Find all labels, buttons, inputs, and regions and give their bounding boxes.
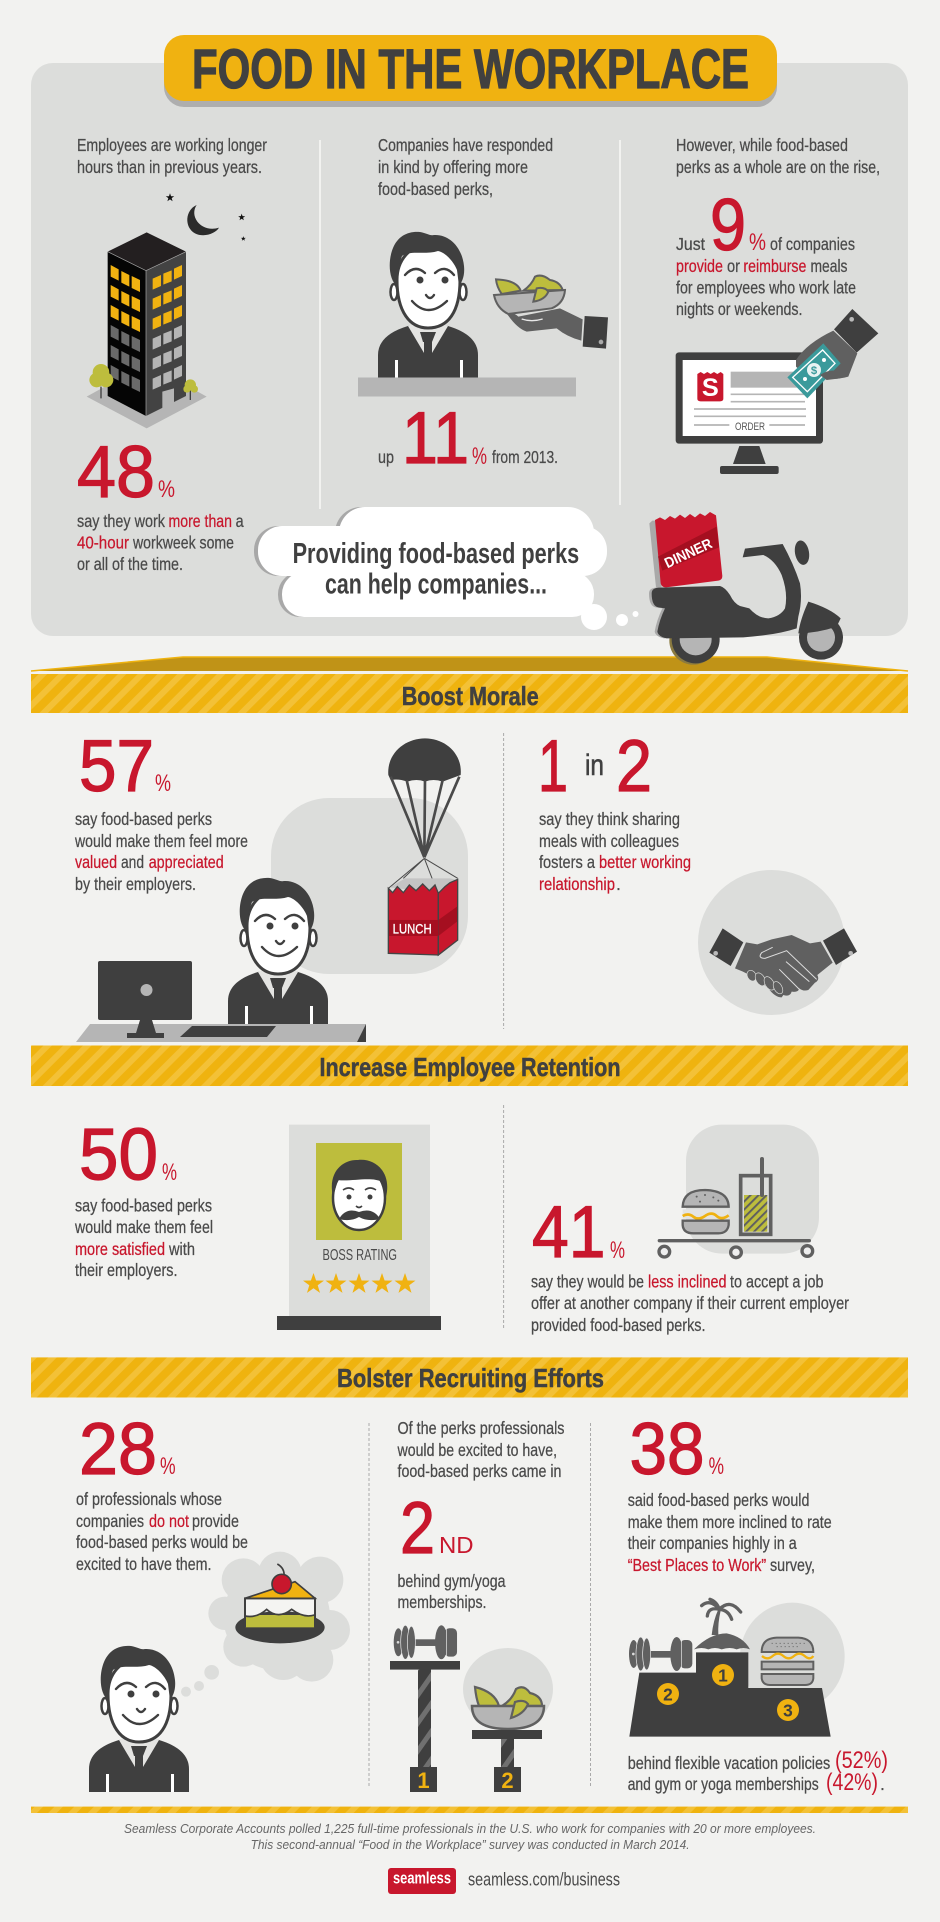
column 3 text with 9 percent stat bbox=[676, 135, 880, 319]
column 3 text with 9 percent stat: 9 bbox=[710, 185, 746, 266]
stat: 28 percent: do not bbox=[149, 1511, 189, 1531]
stat: 1 in 2: meals with colleagues bbox=[539, 831, 679, 851]
stat: 57 percent: % bbox=[155, 770, 171, 797]
panel: intro bbox=[31, 35, 908, 665]
section banner: Bolster Recruiting Efforts bbox=[31, 1357, 908, 1398]
icon: second place pedestal with salad: 2 bbox=[501, 1768, 514, 1793]
stat: 57 percent: would make them feel more bbox=[74, 831, 248, 851]
stat: 57 percent bbox=[74, 726, 248, 894]
stat: 48 percent: or all of the time. bbox=[77, 554, 183, 574]
stat: 57 percent: and bbox=[121, 852, 144, 872]
footnote: Seamless Corporate Accounts polled 1,225 full-time professionals in the U.S. who work for companies with 20 or more employees. bbox=[124, 1821, 816, 1836]
icon: lunch bag parachute bbox=[388, 738, 461, 955]
column 2 text: Companies have responded bbox=[378, 135, 553, 155]
stat: 57 percent: say food-based perks bbox=[75, 809, 212, 829]
icon: monitor with order and hand holding cash: ORDER bbox=[735, 421, 765, 433]
text: ranked second: ND bbox=[439, 1532, 474, 1558]
stat: 48 percent: 48 bbox=[77, 432, 155, 513]
stat: 41 percent: to accept a job bbox=[730, 1272, 824, 1292]
title banner bbox=[164, 35, 777, 107]
column 3 text with 9 percent stat: meals bbox=[810, 256, 848, 276]
five star rating bbox=[303, 1273, 416, 1293]
icon: night office building bbox=[87, 193, 246, 428]
section banner: Boost Morale bbox=[31, 674, 908, 713]
stat: 1 in 2 bbox=[538, 726, 691, 894]
shelf under intro panel bbox=[31, 657, 908, 671]
stat: up 11 percent: % bbox=[472, 443, 487, 470]
stat: 41 percent: provided food-based perks. bbox=[531, 1315, 706, 1335]
stat: 1 in 2: 2 bbox=[616, 726, 652, 807]
footer stripe bbox=[31, 1807, 908, 1813]
stat: 1 in 2: fosters a bbox=[539, 852, 595, 872]
stat: 28 percent: food-based perks would be bbox=[76, 1532, 248, 1552]
stat: 48 percent: more than bbox=[168, 511, 232, 531]
stat: 50 percent bbox=[74, 1114, 213, 1280]
section banner: Increase Employee Retention: Increase Employee Retention bbox=[320, 1052, 620, 1082]
stat: up 11 percent bbox=[378, 398, 558, 479]
icon: lunch bag parachute: LUNCH bbox=[393, 920, 432, 936]
dividers bbox=[369, 1423, 590, 1787]
stat: 28 percent: 28 bbox=[79, 1409, 157, 1490]
icon: thought cloud with cake bbox=[181, 1552, 350, 1697]
stat: up 11 percent: up bbox=[378, 447, 394, 467]
stat: up 11 percent: 11 bbox=[402, 398, 469, 479]
text: ranked second: 2 bbox=[400, 1488, 435, 1569]
icon: monitor with order and hand holding cash bbox=[676, 309, 878, 474]
section banner: Boost Morale: Boost Morale bbox=[402, 681, 539, 711]
stat: 1 in 2: relationship bbox=[539, 874, 615, 894]
section banner: Increase Employee Retention bbox=[31, 1046, 908, 1086]
stat: 1 in 2: 1 bbox=[538, 726, 568, 807]
column 1 text: Employees are working longer bbox=[77, 135, 267, 155]
column 2 text: in kind by offering more bbox=[378, 157, 528, 177]
background blob behind lunch bbox=[271, 798, 468, 974]
stat: 41 percent: 41 bbox=[532, 1192, 606, 1273]
boss rating card bbox=[277, 1125, 441, 1330]
stat: 28 percent bbox=[76, 1409, 248, 1574]
column 3 text with 9 percent stat: However, while food-based bbox=[676, 135, 848, 155]
column 3 text with 9 percent stat: of companies bbox=[770, 234, 855, 254]
divider bbox=[503, 1105, 505, 1328]
stat: up 11 percent: from 2013. bbox=[492, 447, 558, 467]
stat: 28 percent: companies bbox=[76, 1511, 144, 1531]
icon: delivery scooter with dinner bag: DINNER bbox=[662, 536, 715, 572]
text: ranked second: Of the perks professionals bbox=[398, 1418, 565, 1438]
boss rating card: BOSS RATING bbox=[322, 1247, 397, 1264]
icon: boss face bbox=[332, 1160, 387, 1230]
footnote: This second-annual “Food in the Workplace” survey was conducted in March 2014. bbox=[251, 1837, 690, 1852]
column 3 text with 9 percent stat: provide bbox=[676, 256, 723, 276]
stat: 50 percent: more satisfied bbox=[75, 1239, 165, 1259]
text: behind flexible vacation and gym: and gym or yoga memberships bbox=[628, 1774, 819, 1794]
stat: 41 percent: offer at another company if their current employer bbox=[531, 1293, 849, 1313]
stat: 38 percent: % bbox=[709, 1453, 724, 1480]
seamless logo and url: seamless.com/business bbox=[468, 1870, 620, 1890]
text: ranked second bbox=[397, 1418, 565, 1612]
thought cloud callout: Providing food-based perks bbox=[293, 538, 579, 570]
icon: second place pedestal with salad bbox=[463, 1648, 553, 1793]
seamless logo and url: seamless bbox=[393, 1868, 451, 1888]
stat: 50 percent: with bbox=[168, 1239, 195, 1259]
stat: 41 percent: say they would be bbox=[531, 1272, 644, 1292]
stat: 50 percent: would make them feel bbox=[74, 1217, 213, 1237]
icon: winners podium: 3 bbox=[783, 1700, 793, 1720]
stat: 38 percent: their companies highly in a bbox=[628, 1533, 797, 1553]
icon: winners podium: 1 bbox=[718, 1665, 728, 1685]
column 3 text with 9 percent stat: for employees who work late bbox=[676, 278, 856, 298]
thought cloud callout bbox=[254, 507, 638, 630]
icon: delivery scooter with dinner bag bbox=[649, 512, 843, 665]
column 3 text with 9 percent stat: perks as a whole are on the rise, bbox=[676, 157, 880, 177]
stat: 50 percent: % bbox=[162, 1159, 177, 1186]
stat: 38 percent: survey, bbox=[770, 1555, 815, 1575]
column 2 text bbox=[378, 135, 553, 199]
thought cloud callout: can help companies... bbox=[325, 568, 547, 600]
column 3 text with 9 percent stat: reimburse bbox=[743, 256, 806, 276]
stat: 38 percent bbox=[628, 1409, 832, 1575]
stat: 48 percent: say they work bbox=[77, 511, 165, 531]
divider bbox=[503, 733, 505, 1029]
column 1 text bbox=[77, 135, 267, 177]
column 3 text with 9 percent stat: % bbox=[749, 229, 766, 256]
icon: first place pedestal with dumbbell: 1 bbox=[417, 1768, 430, 1793]
text: behind flexible vacation and gym: behind flexible vacation policies bbox=[628, 1753, 831, 1773]
text: behind flexible vacation and gym: . bbox=[880, 1774, 885, 1794]
stat: 57 percent: appreciated bbox=[149, 852, 224, 872]
stat: 50 percent: say food-based perks bbox=[75, 1196, 212, 1216]
title banner: FOOD IN THE WORKPLACE bbox=[192, 37, 749, 100]
icon: winners podium: 2 bbox=[663, 1684, 673, 1704]
stat: 1 in 2: in bbox=[585, 749, 604, 782]
stat: 48 percent: workweek some bbox=[132, 532, 234, 552]
stat: 1 in 2: say they think sharing bbox=[539, 809, 680, 829]
stat: 41 percent: less inclined bbox=[648, 1272, 726, 1292]
column 1 text: hours than in previous years. bbox=[77, 157, 262, 177]
stat: 38 percent: make them more inclined to rate bbox=[628, 1512, 832, 1532]
stat: 41 percent bbox=[531, 1192, 849, 1335]
icon: employee at counter bbox=[378, 232, 478, 378]
stat: 57 percent: by their employers. bbox=[75, 874, 196, 894]
stat: 28 percent: excited to have them. bbox=[76, 1554, 212, 1574]
stat: 50 percent: their employers. bbox=[75, 1260, 178, 1280]
stat: 48 percent: % bbox=[158, 476, 175, 503]
stat: 57 percent: 57 bbox=[79, 726, 154, 807]
icon: handshake bbox=[698, 870, 857, 1015]
stat: 28 percent: of professionals whose bbox=[76, 1489, 222, 1509]
stat: 38 percent: 38 bbox=[630, 1409, 704, 1490]
text: behind flexible vacation and gym: (42%) bbox=[826, 1769, 878, 1796]
stat: 48 percent: a bbox=[236, 511, 244, 531]
icon: burger and drink on cart bbox=[659, 1125, 819, 1258]
section banner: Bolster Recruiting Efforts: Bolster Recruiting Efforts bbox=[337, 1363, 604, 1393]
text: ranked second: would be excited to have, bbox=[397, 1440, 557, 1460]
stat: 48 percent bbox=[77, 432, 244, 574]
stat: 28 percent: % bbox=[160, 1453, 176, 1480]
stat: 48 percent: 40-hour bbox=[77, 532, 129, 552]
column 3 text with 9 percent stat: or bbox=[727, 256, 740, 276]
stat: 38 percent: said food-based perks would bbox=[628, 1490, 809, 1510]
icon: worker at desk bbox=[76, 878, 366, 1042]
text: ranked second: food-based perks came in bbox=[398, 1461, 562, 1481]
icon: monitor with order and hand holding cash: $ bbox=[811, 365, 818, 377]
stat: 50 percent: 50 bbox=[79, 1114, 158, 1196]
icon: first place pedestal with dumbbell bbox=[390, 1625, 460, 1793]
stat: 57 percent: valued bbox=[75, 852, 117, 872]
icon: winners podium bbox=[629, 1599, 845, 1737]
column 2 text: food-based perks, bbox=[378, 179, 493, 199]
column 3 text with 9 percent stat: nights or weekends. bbox=[676, 299, 802, 319]
stat: 41 percent: % bbox=[610, 1237, 625, 1264]
stat: 28 percent: provide bbox=[192, 1511, 239, 1531]
text: behind flexible vacation and gym: (52%) bbox=[835, 1747, 888, 1774]
counter bbox=[358, 378, 576, 396]
icon: employee thinking bbox=[89, 1646, 189, 1792]
stat: 1 in 2: better working bbox=[599, 852, 691, 872]
icon: monitor with order and hand holding cash: S bbox=[702, 374, 719, 402]
icon: hand serving salad bbox=[494, 276, 608, 349]
text: ranked second: behind gym/yoga bbox=[398, 1571, 506, 1591]
text: behind flexible vacation and gym bbox=[628, 1747, 888, 1796]
seamless logo and url bbox=[388, 1868, 620, 1894]
footnote bbox=[124, 1821, 816, 1852]
column 3 text with 9 percent stat: Just bbox=[676, 234, 705, 254]
stat: 1 in 2: . bbox=[616, 874, 621, 894]
stat: 38 percent: “Best Places to Work” bbox=[628, 1555, 766, 1575]
text: ranked second: memberships. bbox=[398, 1592, 486, 1612]
